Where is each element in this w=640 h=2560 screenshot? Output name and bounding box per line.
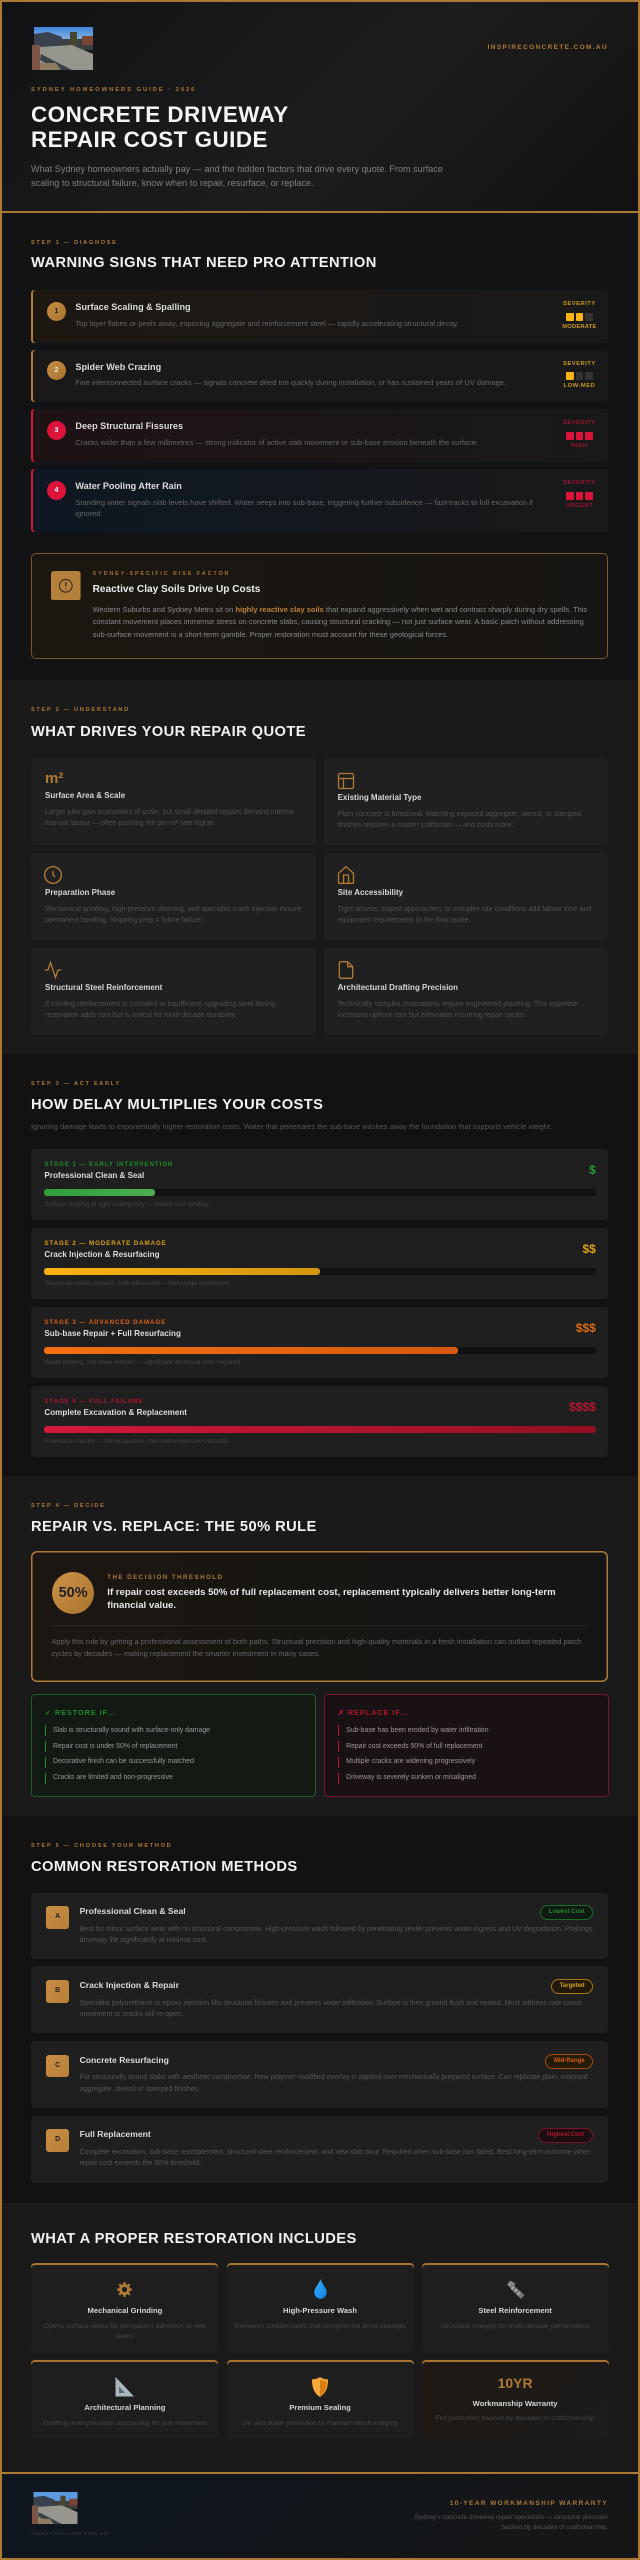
card: premium sealing [226, 2360, 414, 2439]
restore item 4: Cracks are limited and non-progressive [53, 1774, 173, 1781]
card description: If existing reinforcement is corroded or insufficient, upgrading steel during [45, 1000, 275, 1008]
stage label: STAGE 1 — EARLY INTERVENTION [44, 1161, 173, 1168]
icon: square metres: m² [45, 770, 63, 787]
step 4 label: STEP 4 — DECIDE [31, 1503, 106, 1509]
callout body: constant movement places immense stress on concrete slabs, causing structural cracking — not just surface wear. A basic patch without addressing [93, 617, 584, 626]
callout body: sub-surface movement is a short-term gamble. Proper restoration must account for these geological forces. [93, 630, 448, 639]
item description: Removes contaminants that compromise bond strength [235, 2323, 405, 2330]
card title: Existing Material Type [338, 793, 421, 802]
card description [45, 808, 294, 827]
warning sign 3 [31, 409, 608, 462]
item title: High-Pressure Wash [283, 2306, 357, 2315]
replace item 1: Sub-base has been eroded by water infiltration [346, 1727, 489, 1734]
card title: Surface Area & Scale [45, 791, 125, 800]
cost pill: Highest Cost [547, 2132, 584, 2138]
severity meter moderate [562, 301, 597, 330]
footer logo photo [32, 2492, 78, 2524]
icon: house [338, 866, 354, 884]
stage note: Water pooling, sub-base erosion — significant structural work required [44, 1359, 240, 1366]
stage note: Structural cracks present, slab still sound — mid-range investment [44, 1280, 229, 1287]
sign description [75, 498, 533, 518]
card description [338, 810, 581, 829]
sign description: Top layer flakes or peels away, exposing aggregate and reinforcement steel — rapidly accelerating structural decay. [75, 319, 459, 328]
cost level: $$ [582, 1242, 596, 1256]
card description [45, 905, 301, 924]
card: mechanical grinding [31, 2263, 218, 2353]
card: site access [324, 853, 608, 940]
badge D: D [55, 2136, 60, 2143]
method D [31, 2116, 608, 2183]
method description [80, 1926, 593, 1944]
method description [80, 2148, 591, 2167]
icon: water drop [314, 2279, 327, 2299]
replace item 2: Repair cost exceeds 50% of full replacement [346, 1743, 482, 1750]
stage title: Crack Injection & Resurfacing [44, 1250, 160, 1259]
method C [31, 2041, 608, 2108]
card description: Plain concrete is functional. Matching exposed aggregate, stencil, or stamped [338, 810, 581, 818]
item description: Drafting-level precision accounting for soil movement [43, 2420, 207, 2427]
warning sign 4 [31, 469, 608, 532]
card: surface area [31, 758, 316, 845]
main title: REPAIR COST GUIDE [31, 127, 268, 152]
step 5 label: STEP 5 — CHOOSE YOUR METHOD [31, 1843, 172, 1849]
card description: Tight access, sloped approaches, or complex site conditions add labour time and [338, 905, 591, 913]
cost pill [545, 2054, 593, 2069]
card description: finishes requires a master craftsman — and costs more. [338, 821, 513, 829]
section: what is included [0, 2203, 640, 2472]
footer warranty heading: 10-YEAR WORKMANSHIP WARRANTY [450, 2500, 608, 2507]
icon: clock [44, 866, 62, 884]
main title: CONCRETE DRIVEWAY [31, 102, 289, 126]
stage label: STAGE 3 — ADVANCED DAMAGE [44, 1319, 166, 1326]
severity label: SEVERITY [563, 480, 596, 486]
sign description: Standing water signals slab levels have shifted. Water seeps into sub-base, triggering further subsidence — fast-tracks to full excavation if [75, 498, 533, 507]
cost pill: Lowest Cost [549, 1909, 584, 1915]
stage note: Foundation failure — full excavation, the most expensive outcome [44, 1438, 228, 1445]
sign title: Spider Web Crazing [75, 362, 161, 372]
card description: permanent bonding. Skipping prep = future failure. [45, 916, 203, 924]
method B [31, 1966, 608, 2033]
icon: bolt [507, 2280, 524, 2299]
item description: Full protection backed by decades of craftsmanship [436, 2415, 595, 2422]
stage 3 card [31, 1307, 608, 1378]
warranty figure: 10YR [498, 2375, 533, 2391]
cost bar [44, 1268, 596, 1275]
method A [31, 1893, 608, 1959]
card description [338, 905, 591, 924]
card description: Mechanical grinding, high-pressure cleaning, and specialist crack injection ensure [45, 905, 301, 913]
section heading: WHAT DRIVES YOUR REPAIR QUOTE [31, 724, 306, 740]
icon: set square [116, 2377, 134, 2396]
threshold explanation: cycles by decades — making replacement the smarter investment in many cases. [51, 1649, 320, 1658]
sign description: Cracks wider than a few millimetres — strong indicator of active slab movement or sub-base erosion beneath the surface. [75, 438, 478, 447]
item description: UV and water protection to maintain finish integrity [242, 2420, 398, 2427]
badge B: B [55, 1987, 60, 1994]
item description: layers [116, 2333, 134, 2340]
footer description: Sydney's concrete driveway repair specialists — structural precision [415, 2514, 608, 2521]
method description: aggregate, stencil or stamped finishes. [80, 2086, 200, 2093]
threshold panel [31, 1551, 608, 1682]
number badge 4: 4 [54, 487, 58, 494]
card description: Technically complex restorations require engineered planning. This expertise [338, 1000, 578, 1008]
number badge 4 [47, 481, 66, 500]
icon: layout [338, 772, 354, 790]
severity level: URGENT [566, 503, 593, 509]
callout kicker: SYDNEY-SPECIFIC RISK FACTOR [93, 571, 230, 577]
stage label: STAGE 2 — MODERATE DAMAGE [44, 1240, 167, 1247]
threshold explanation: Apply this rule by getting a professional assessment of both paths. Structural precision and high-quality materials in a fresh installation can outlast repeated patch [51, 1637, 582, 1646]
cost bar [44, 1426, 596, 1433]
step 1 label: STEP 1 — DIAGNOSE [31, 240, 118, 246]
sign description: ignored. [75, 509, 102, 518]
replace heading: ✗ REPLACE IF... [338, 1708, 409, 1717]
section: delay costs [0, 1054, 640, 1476]
stage note: Surface chasing or light scaling only — lowest cost window [44, 1201, 209, 1208]
sign title: Deep Structural Fissures [75, 421, 183, 431]
severity label: SEVERITY [563, 420, 596, 426]
card: preparation [31, 853, 316, 940]
card description: Larger jobs gain economies of scale, but small detailed repairs demand intense [45, 808, 294, 816]
callout body: Western Suburbs and Sydney Metro sit on highly reactive clay soils that expand aggressively when wet and contract sharply during dry spells. This [93, 605, 587, 614]
method title: Concrete Resurfacing [80, 2055, 169, 2065]
section: repair vs replace [0, 1476, 640, 1816]
cost pill: Mid-Range [554, 2058, 585, 2064]
step 2 label: STEP 2 — UNDERSTAND [31, 707, 130, 713]
section heading: HOW DELAY MULTIPLIES YOUR COSTS [31, 1097, 323, 1113]
callout title: Reactive Clay Soils Drive Up Costs [93, 584, 260, 595]
badge C [46, 2055, 69, 2077]
card description: equipment requirements to the final quote. [338, 916, 470, 924]
footer description: backed by decades of craftsmanship. [502, 2524, 608, 2531]
callout body [92, 605, 587, 639]
icon: gear [117, 2282, 132, 2297]
callout: reactive clay soils [31, 553, 608, 659]
section heading: COMMON RESTORATION METHODS [31, 1859, 298, 1875]
section: quote drivers [0, 680, 640, 1054]
sign description: Fine interconnected surface cracks — signals concrete dried too quickly during installation, or has sustained years of UV damage. [75, 378, 506, 387]
step 3 label: STEP 3 — ACT EARLY [31, 1081, 121, 1087]
cost pill [538, 2128, 593, 2143]
stage 2 card [31, 1228, 608, 1299]
cost pill: Targeted [560, 1983, 585, 1989]
number badge 3 [47, 421, 66, 440]
card: workmanship warranty [422, 2360, 609, 2439]
number badge 2 [47, 361, 66, 380]
footer panel [0, 2472, 640, 2560]
threshold explanation [51, 1637, 582, 1658]
50 percent badge [52, 1572, 94, 1614]
restore item 3: Decorative finish can be successfully matched [53, 1758, 194, 1765]
icon: alert [51, 571, 81, 600]
severity meter high [563, 420, 596, 449]
restore item 2: Repair cost is under 50% of replacement [53, 1743, 177, 1750]
section: restoration methods [0, 1816, 640, 2203]
section heading: WHAT A PROPER RESTORATION INCLUDES [31, 2231, 357, 2247]
card description [45, 1000, 275, 1019]
item description [44, 2323, 206, 2340]
method description: Best for minor surface wear with no structural compromise. High-pressure wash followed by penetrating sealer prevents water ingress and UV degradation. Prolongs [80, 1926, 593, 1933]
method title: Crack Injection & Repair [80, 1980, 179, 1990]
item title: Steel Reinforcement [478, 2306, 552, 2315]
severity level: HIGH [571, 443, 588, 449]
badge C: C [55, 2062, 60, 2069]
cost pill [551, 1979, 593, 1994]
main title [31, 102, 289, 152]
panel: replace if [324, 1694, 608, 1797]
item title: Architectural Planning [84, 2403, 165, 2412]
severity label: SEVERITY [563, 361, 596, 367]
subtitle: scaling to structural failure, know when to repair, resurface, or replace. [31, 178, 314, 188]
cost level: $$$ [576, 1321, 596, 1335]
guide kicker: SYDNEY HOMEOWNERS GUIDE · 2026 [31, 86, 196, 92]
item title: Workmanship Warranty [473, 2399, 558, 2408]
method description [80, 2074, 588, 2093]
icon: shield [312, 2377, 328, 2397]
stage title: Complete Excavation & Replacement [44, 1408, 187, 1417]
card title: Preparation Phase [45, 888, 115, 897]
icon: document [338, 961, 354, 979]
sign title: Water Pooling After Rain [75, 481, 182, 491]
severity meter urgent [563, 480, 596, 509]
card description: manual labour — often pushing the per-m² rate higher. [45, 819, 216, 827]
replace item 4: Driveway is severely sunken or misaligned [346, 1774, 476, 1781]
severity meter low-med [563, 361, 596, 389]
card title: Site Accessibility [338, 888, 403, 897]
card title: Architectural Drafting Precision [338, 983, 458, 992]
header panel [0, 0, 640, 213]
panel: restore if [31, 1694, 316, 1797]
card: architectural planning [31, 2360, 218, 2439]
restore heading: ✓ RESTORE IF... [45, 1708, 116, 1717]
card: steel reinforcement [422, 2263, 609, 2353]
section: warning signs [0, 213, 640, 680]
stage 1 card [31, 1149, 608, 1220]
method description: movement or cracks will re-open. [80, 2011, 183, 2018]
item description: Structural integrity for multi-decade performance [440, 2323, 590, 2330]
number badge 1 [47, 302, 66, 321]
card description [338, 1000, 578, 1019]
footer website: inspireconcrete.com.au [31, 2531, 108, 2537]
badge A [46, 1906, 69, 1929]
card: drafting [324, 948, 608, 1035]
method description: driveway life significantly at minimal cost. [80, 1937, 208, 1944]
card: material type [324, 758, 608, 845]
section heading: REPAIR VS. REPLACE: THE 50% RULE [31, 1519, 317, 1535]
card: steel reinforcement [31, 948, 316, 1035]
badge D [46, 2129, 69, 2152]
cost level: $ [589, 1163, 596, 1177]
stage 4 card [31, 1386, 608, 1457]
number badge 1: 1 [54, 308, 58, 315]
method description: For structurally sound slabs with aesthetic compromise. New polymer-modified overlay is applied over mechanically prepared surface. Can replicate plain, exposed [80, 2074, 588, 2081]
card: high pressure wash [226, 2263, 414, 2353]
restore item 1: Slab is structurally sound with surface-only damage [53, 1727, 210, 1734]
icon: activity pulse [44, 960, 62, 980]
method title: Professional Clean & Seal [80, 1906, 186, 1916]
subtitle [31, 164, 443, 188]
item title: Premium Sealing [289, 2403, 351, 2412]
header logo photo [32, 27, 93, 70]
stage label: STAGE 4 — FULL FAILURE [44, 1398, 144, 1405]
method description: Complete excavation, sub-base reinstatement, structural steel reinforcement, and new slab pour. Required when sub-base has failed. Best long-term outcome when [80, 2149, 591, 2156]
stage title: Professional Clean & Seal [44, 1171, 144, 1180]
method title: Full Replacement [80, 2129, 151, 2139]
50 percent badge: 50% [59, 1585, 88, 1601]
method description [80, 2000, 582, 2018]
method description: repair cost exceeds the 50% threshold. [80, 2160, 201, 2167]
number badge 2: 2 [54, 367, 58, 374]
item description: Opens surface pores for permanent adhesion of new [44, 2323, 206, 2330]
warning sign 1 [31, 290, 608, 342]
badge A: A [55, 1913, 60, 1920]
subtitle: What Sydney homeowners actually pay — and the hidden factors that drive every quote. From surface [31, 164, 443, 174]
number badge 3: 3 [54, 427, 58, 434]
threshold statement: financial value. [107, 1600, 176, 1611]
cost level: $$$$ [569, 1400, 596, 1414]
item title: Mechanical Grinding [88, 2306, 162, 2315]
severity label: SEVERITY [563, 301, 596, 307]
section heading: WARNING SIGNS THAT NEED PRO ATTENTION [31, 255, 377, 271]
card description: increases upfront cost but eliminates recurring repair cycles. [338, 1011, 526, 1019]
footer description [415, 2513, 608, 2533]
severity level: MODERATE [562, 324, 597, 330]
severity level: LOW-MED [564, 383, 595, 389]
card title: Structural Steel Reinforcement [45, 983, 162, 992]
website label: INSPIRECONCRETE.COM.AU [488, 44, 608, 51]
cost bar [44, 1189, 596, 1196]
sign title: Surface Scaling & Spalling [75, 302, 191, 312]
method description: Specialist polyurethane or epoxy injection fills structural fissures and prevents water infiltration. Surface is then ground flush and sealed. Must address root-cause [80, 2000, 582, 2007]
cost pill [540, 1905, 593, 1920]
section intro: Ignoring damage leads to exponentially higher restoration costs. Water that penetrates the sub-base washes away the foundation that supports vehicle weight. [31, 1122, 552, 1131]
replace item 3: Multiple cracks are widening progressively [346, 1758, 475, 1765]
warning sign 2 [31, 350, 608, 402]
card description: restoration adds cost but is critical for multi-decade durability. [45, 1011, 236, 1019]
cost bar [44, 1347, 596, 1354]
threshold kicker: THE DECISION THRESHOLD [107, 1574, 223, 1581]
badge B [46, 1980, 69, 2003]
stage title: Sub-base Repair + Full Resurfacing [44, 1329, 181, 1338]
threshold statement: If repair cost exceeds 50% of full replacement cost, replacement typically delivers better long-term [107, 1587, 556, 1598]
threshold statement [107, 1587, 556, 1611]
